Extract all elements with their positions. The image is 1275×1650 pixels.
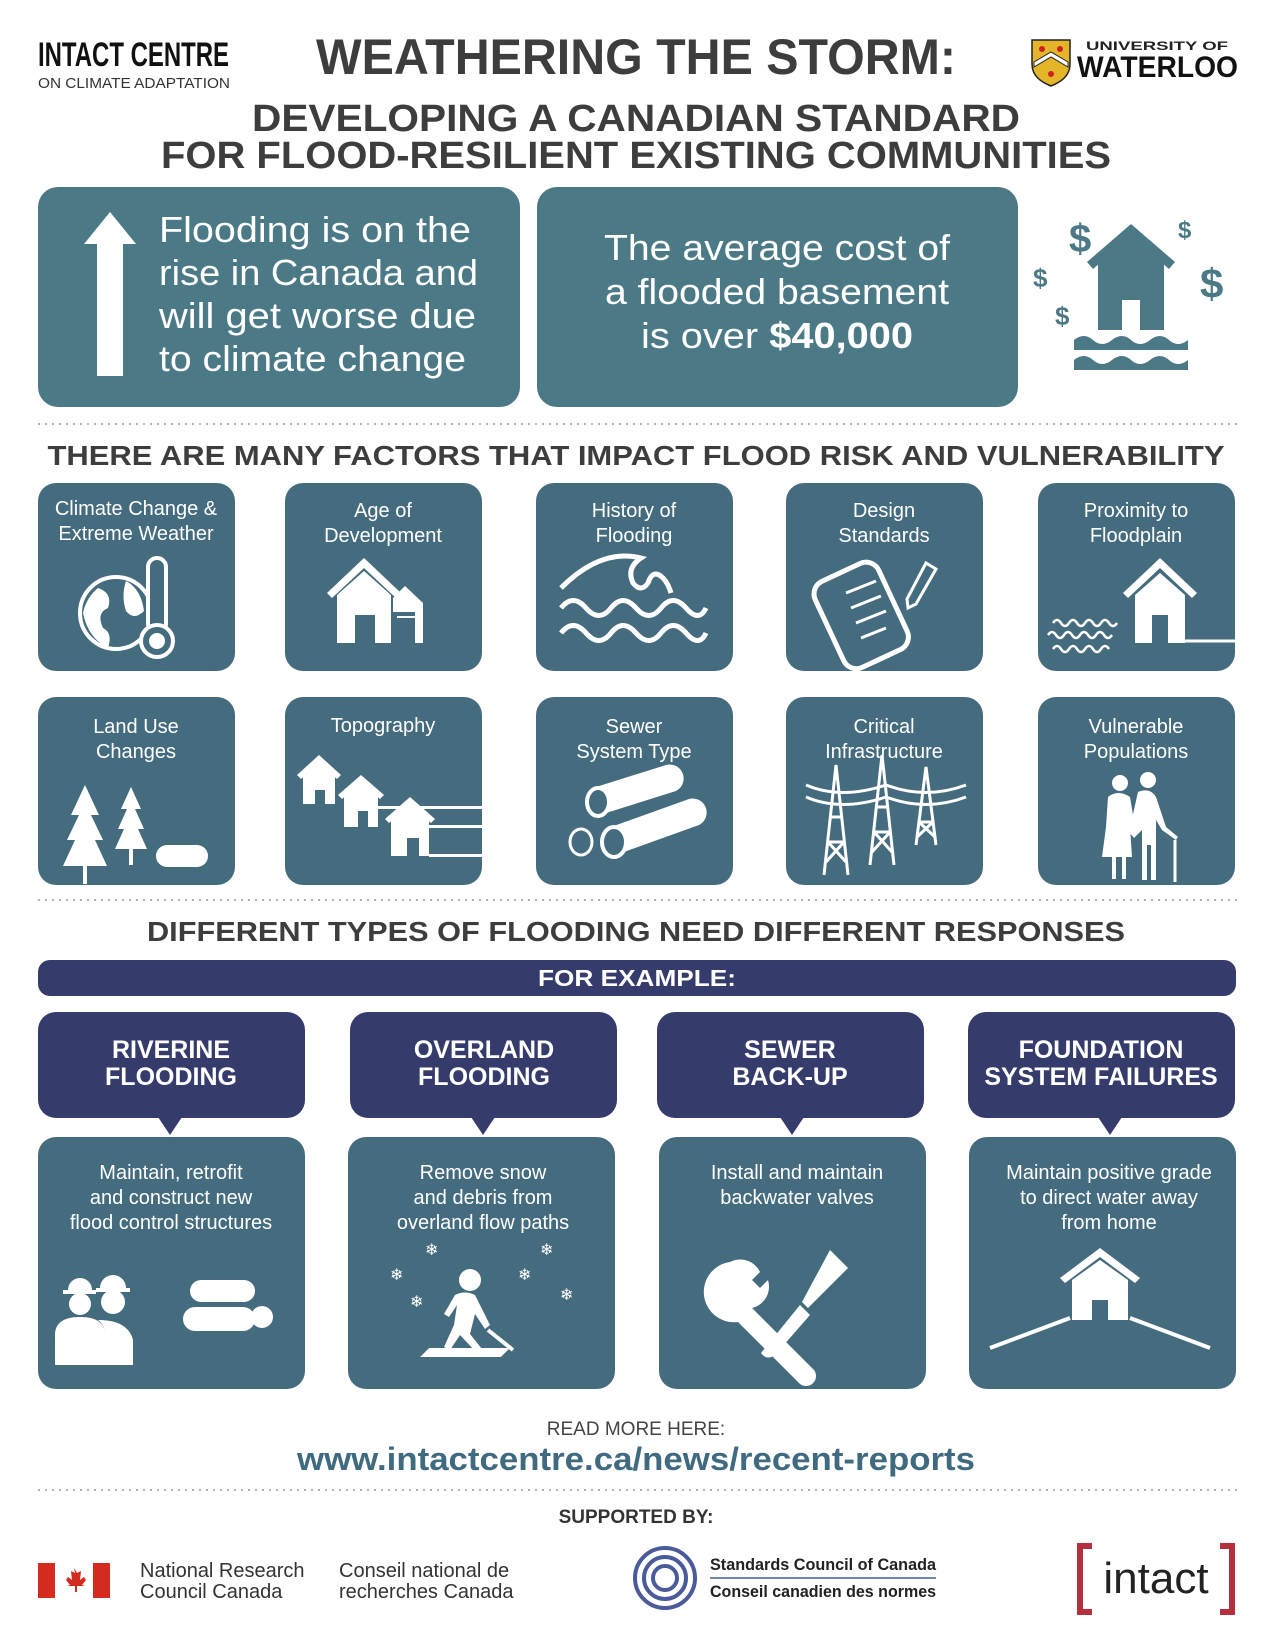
tile: proximity to floodplain: Proximity to [1084, 500, 1188, 522]
subtitle: FOR FLOOD-RESILIENT EXISTING COMMUNITIES [161, 135, 1111, 177]
tile: age of development: Age of [354, 500, 412, 522]
tile: topography [285, 697, 482, 885]
logo: NRC: Council Canada [140, 1581, 283, 1603]
logo: university of waterloo: WATERLOO [1077, 51, 1238, 84]
logo: NRC: recherches Canada [339, 1581, 514, 1603]
subtitle [161, 98, 1111, 177]
heading: flooding types: DIFFERENT TYPES OF FLOODING NEED DIFFERENT RESPONSES [147, 916, 1125, 947]
title: WEATHERING THE STORM: [316, 29, 956, 85]
callout: sewer back-up: backwater valves [720, 1187, 874, 1209]
icon: person shoveling snow: ❄ [410, 1294, 423, 1311]
logo: university of waterloo [1032, 39, 1238, 86]
callout: riverine flooding [38, 1012, 305, 1389]
callout: riverine flooding: Maintain, retrofit [99, 1162, 243, 1184]
callout: foundation system failures: Maintain positive grade [1006, 1162, 1212, 1184]
bar: for example [38, 960, 1236, 996]
callout: overland flooding: FLOODING [418, 1063, 550, 1091]
callout: riverine flooding: and construct new [90, 1187, 253, 1209]
subtitle: DEVELOPING A CANADIAN STANDARD [252, 98, 1020, 140]
callout: overland flooding [348, 1012, 617, 1389]
icon: wrench and screwdriver [704, 1250, 848, 1386]
read more: READ MORE HERE: [547, 1419, 725, 1440]
logo: intact centre [38, 36, 230, 92]
tile: vulnerable populations: Populations [1084, 741, 1188, 763]
panel: average cost [537, 187, 1018, 407]
callout: riverine flooding: FLOODING [105, 1063, 237, 1091]
tile: climate change: Extreme Weather [58, 523, 214, 545]
tile: proximity to floodplain: Floodplain [1090, 525, 1182, 547]
tile: climate change: Climate Change & [55, 498, 218, 520]
icon: person shoveling snow: ❄ [390, 1267, 403, 1284]
callout: foundation system failures: SYSTEM FAILURES [984, 1063, 1218, 1091]
callout: overland flooding: OVERLAND [414, 1036, 554, 1064]
icon: flooded house with dollars: $ [1069, 217, 1091, 261]
tile: critical infrastructure: Infrastructure [825, 741, 943, 763]
callout: overland flooding: and debris from [414, 1187, 552, 1209]
callout: overland flooding: Remove snow [420, 1162, 547, 1184]
panel: flooding on the rise: will get worse due [158, 295, 476, 336]
panel: flooding on the rise: Flooding is on the [159, 209, 471, 250]
callout: riverine flooding: RIVERINE [112, 1036, 230, 1064]
icon: house on graded slope [990, 1248, 1210, 1348]
tile: sewer system type: Sewer [606, 716, 663, 738]
callout: foundation system failures: from home [1061, 1212, 1157, 1234]
logo: university of waterloo: UNIVERSITY OF [1086, 39, 1228, 53]
icon: flooded house with dollars: $ [1033, 263, 1048, 293]
icon: flooded house with dollars: $ [1178, 217, 1192, 244]
panel: flooding on the rise [38, 187, 520, 407]
tile: land use changes: Changes [96, 741, 176, 763]
panel: average cost: is over $40,000 [641, 315, 913, 356]
read more [296, 1419, 975, 1477]
callout: overland flooding: overland flow paths [397, 1212, 569, 1234]
panel: flooding on the rise: to climate change [159, 338, 466, 379]
logo: intact centre: ON CLIMATE ADAPTATION [38, 75, 230, 92]
panel: flooding on the rise: rise in Canada and [159, 252, 478, 293]
icon: flooded house with dollars [1033, 217, 1223, 370]
tile: topography: Topography [331, 715, 435, 737]
callout: sewer back-up: BACK-UP [732, 1063, 848, 1091]
logo: intact: intact [1103, 1554, 1209, 1603]
logo: NRC: National Research [140, 1560, 305, 1582]
tile: sewer system type [536, 697, 733, 885]
icon: person shoveling snow: ❄ [540, 1242, 553, 1259]
tile: age of development [285, 483, 482, 671]
callout: foundation system failures: FOUNDATION [1019, 1036, 1183, 1064]
panel: average cost: The average cost of [604, 227, 951, 268]
logo: NRC: Conseil national de [339, 1560, 509, 1582]
callout: foundation system failures [968, 1012, 1236, 1389]
read more: www.intactcentre.ca/news/recent-reports [296, 1441, 975, 1477]
icon: person shoveling snow: ❄ [560, 1287, 573, 1304]
logo: standards council: Standards Council of Canada [710, 1555, 937, 1574]
tile: history of flooding: History of [592, 500, 677, 522]
logo: standards council [635, 1548, 937, 1608]
icon: flooded house with dollars: $ [1055, 301, 1070, 331]
tile: history of flooding: Flooding [596, 525, 672, 547]
tile: critical infrastructure [786, 697, 983, 885]
callout: sewer back-up [657, 1012, 926, 1389]
icon: flooded house with dollars: $ [1200, 260, 1223, 307]
supported by: SUPPORTED BY: [559, 1507, 713, 1528]
tile: proximity to floodplain [1038, 483, 1235, 671]
tile: sewer system type: System Type [576, 741, 692, 763]
logo: intact centre: INTACT CENTRE [38, 36, 229, 74]
tile: design standards: Standards [838, 525, 930, 547]
bar: for example: FOR EXAMPLE: [538, 965, 736, 991]
icon: workers and pipes [55, 1275, 273, 1365]
callout: foundation system failures: to direct water away [1020, 1187, 1198, 1209]
icon: person shoveling snow: ❄ [425, 1242, 438, 1259]
tile: age of development: Development [324, 525, 442, 547]
tile: vulnerable populations [1038, 697, 1235, 885]
tile: land use changes: Land Use [93, 716, 179, 738]
icon: up arrow [84, 212, 136, 376]
tile: land use changes [38, 697, 235, 885]
callout: sewer back-up: Install and maintain [711, 1162, 883, 1184]
icon: person shoveling snow [390, 1242, 573, 1355]
tile: vulnerable populations: Vulnerable [1089, 716, 1183, 738]
callout: sewer back-up: SEWER [744, 1036, 836, 1064]
tile: climate change [38, 483, 235, 671]
logo: intact [1080, 1546, 1232, 1612]
tile: design standards [786, 483, 983, 673]
panel: average cost: a flooded basement [605, 271, 949, 312]
heading: factors: THERE ARE MANY FACTORS THAT IMPACT FLOOD RISK AND VULNERABILITY [48, 440, 1225, 471]
icon: person shoveling snow: ❄ [518, 1267, 531, 1284]
logo: standards council: Conseil canadien des normes [710, 1582, 936, 1601]
logo: NRC [38, 1560, 514, 1603]
tile: critical infrastructure: Critical [853, 716, 915, 738]
tile: history of flooding [536, 483, 733, 671]
callout: riverine flooding: flood control structures [70, 1212, 272, 1234]
tile: design standards: Design [853, 500, 915, 522]
